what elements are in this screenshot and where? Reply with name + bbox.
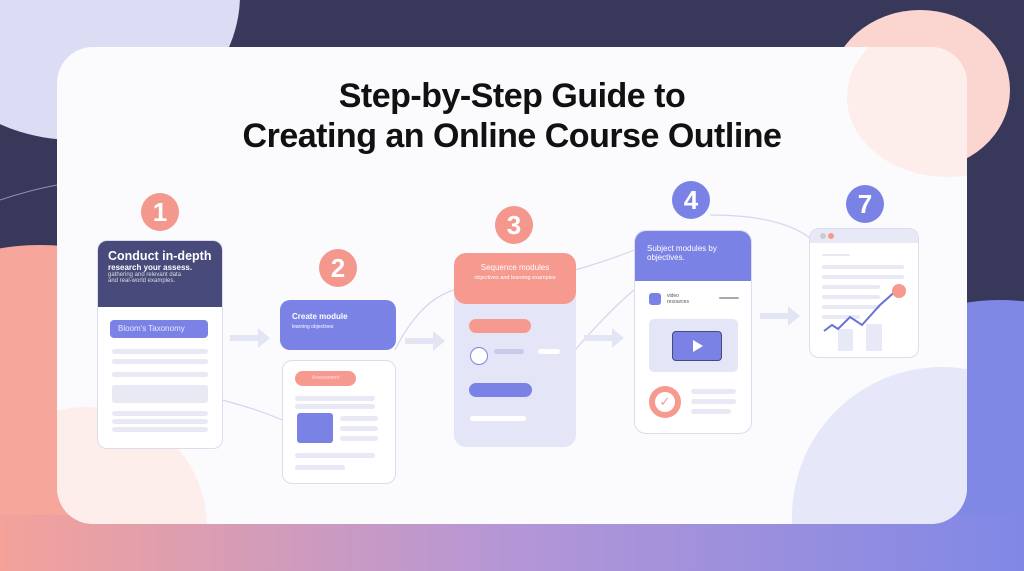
badge 3 — [495, 206, 533, 244]
card 4: video — [667, 293, 679, 299]
card 2 header — [280, 300, 396, 350]
title: Creating an Online Course Outline — [243, 117, 781, 155]
arrow 1 — [230, 328, 270, 348]
card 1: Bloom's Taxonomy — [118, 324, 185, 333]
arrow 3 — [584, 328, 624, 348]
arrow 2 — [405, 331, 445, 351]
card 1: gathering and relevant data — [108, 272, 181, 278]
step 3 — [454, 206, 576, 447]
badge 2 — [319, 249, 357, 287]
card 3: Sequence modules — [481, 263, 549, 272]
card 7 — [809, 228, 919, 358]
title: Step-by-Step Guide to — [339, 77, 685, 115]
badge 1 — [141, 193, 179, 231]
title — [243, 77, 781, 155]
step 7 — [809, 185, 919, 358]
step 4 — [634, 181, 752, 434]
badge 7 — [846, 185, 884, 223]
step 1 — [97, 193, 223, 449]
card 2 body — [282, 360, 396, 484]
main card — [57, 47, 967, 524]
badge 1: 1 — [153, 197, 167, 227]
card 4 — [634, 230, 752, 434]
badge 4: 4 — [684, 185, 698, 215]
card 2 header: Create module — [292, 312, 348, 321]
badge 4 — [672, 181, 710, 219]
card 2 header: learning objectives — [292, 324, 333, 330]
card 4: objectives. — [647, 253, 685, 262]
badge 7: 7 — [858, 189, 872, 219]
card 3: objectives and learning examples — [474, 275, 556, 281]
badge 3: 3 — [507, 210, 521, 240]
badge 2: 2 — [331, 253, 345, 283]
card 4: resources — [667, 299, 689, 305]
card 1 — [97, 240, 223, 449]
arrow 4 — [760, 306, 800, 326]
card 1: research your assess. — [108, 263, 192, 272]
card 1: Conduct in-depth — [108, 249, 211, 263]
card 4: Subject modules by — [647, 244, 717, 253]
card 3 — [454, 253, 576, 447]
card 2 body: Assessment — [312, 375, 339, 381]
card 4: ✓ — [660, 394, 670, 409]
step 2 — [280, 249, 396, 484]
card 1: and real-world examples. — [108, 278, 175, 284]
